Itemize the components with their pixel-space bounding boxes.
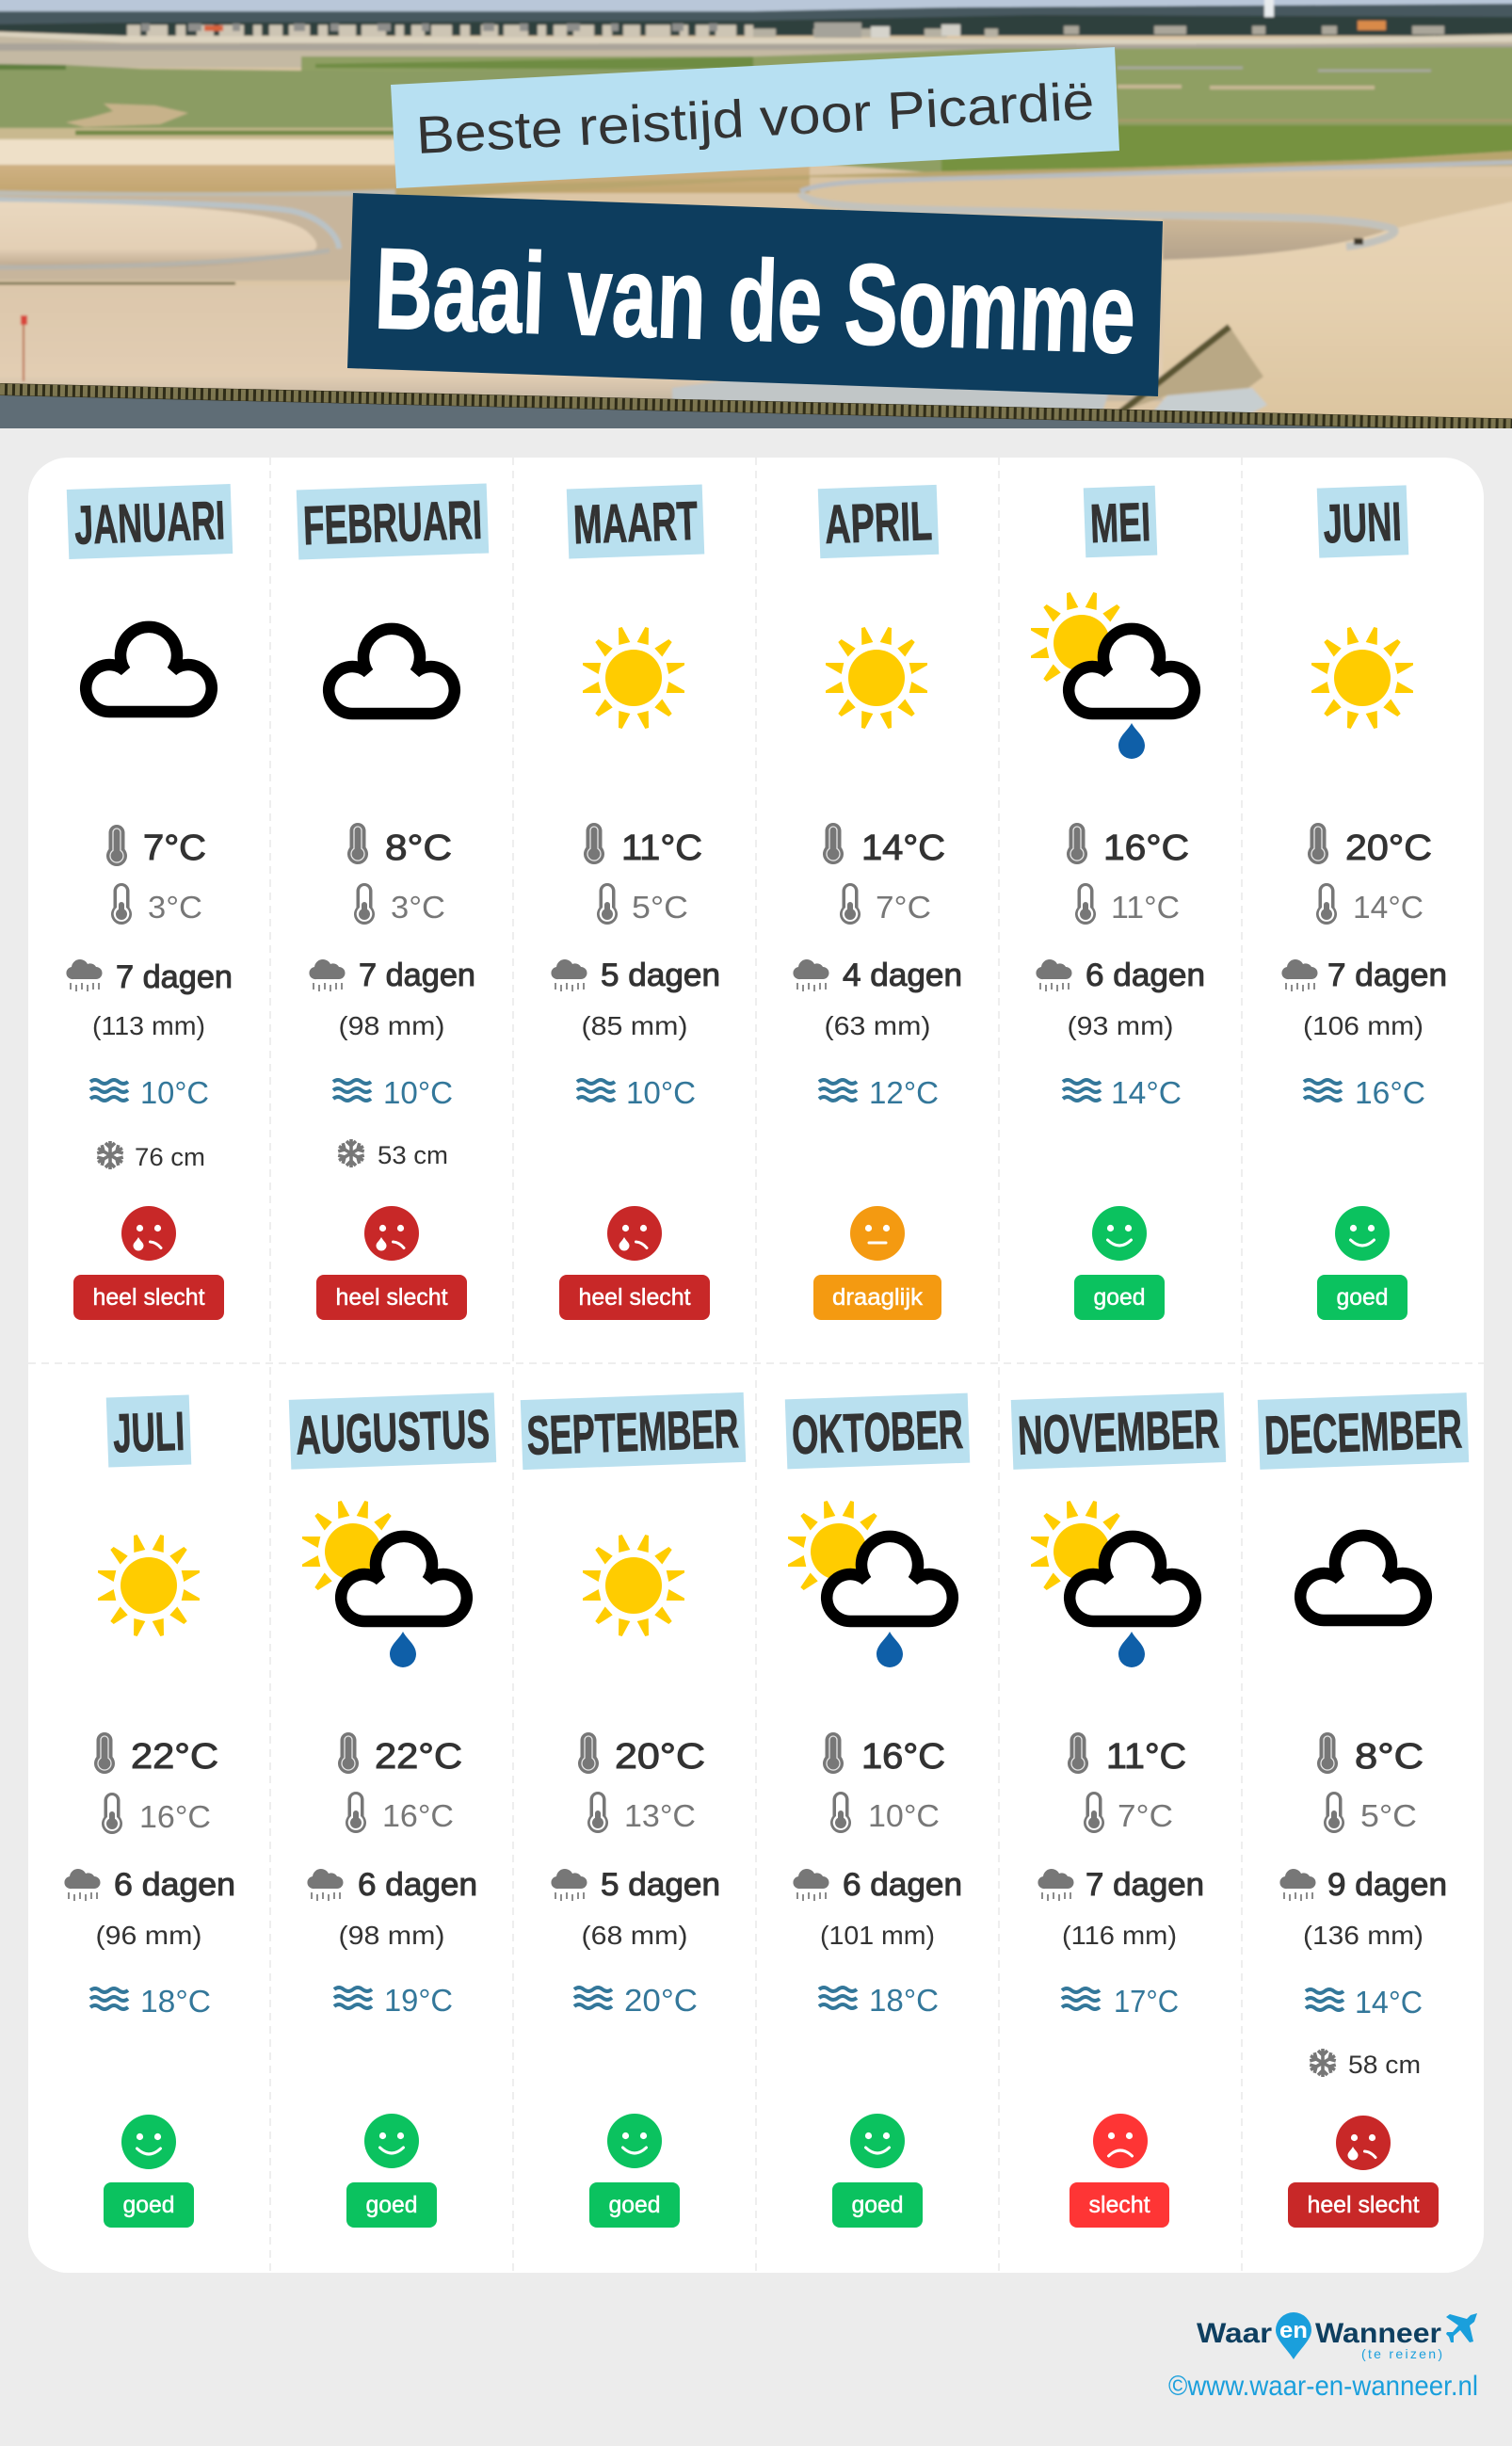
rainfall: (68 mm)	[582, 1921, 687, 1950]
month heading: JUNI	[1322, 491, 1403, 555]
icon: thermometer high	[1068, 1732, 1088, 1774]
month heading: APRIL	[824, 491, 933, 555]
panel: juni	[1281, 485, 1447, 1320]
rain days: 6 dagen	[1086, 957, 1205, 993]
title text: Baai van de Somme	[373, 224, 1137, 378]
max temperature: 14°C	[861, 829, 945, 868]
min temperature: 7°C	[1118, 1798, 1173, 1833]
icon: sun	[98, 1535, 200, 1636]
icon: thermometer low	[1084, 1792, 1104, 1833]
panel: april	[793, 485, 962, 1320]
icon: rain	[551, 1869, 587, 1901]
max temperature: 8°C	[385, 829, 452, 868]
rating badge: goed	[851, 2192, 904, 2218]
rating badge	[589, 2182, 680, 2228]
rating badge: heel slecht	[1307, 2192, 1420, 2218]
icon: cloud	[329, 629, 455, 714]
rating badge	[346, 2182, 437, 2228]
icon: thermometer low	[111, 883, 132, 925]
rainfall: (98 mm)	[339, 1011, 444, 1040]
min temperature: 11°C	[1111, 890, 1180, 925]
icon: thermometer high	[338, 1732, 359, 1774]
icon: crying face	[364, 1206, 419, 1261]
icon: sun behind rain cloud	[1031, 1501, 1196, 1667]
icon: sun	[583, 627, 684, 729]
rating badge: goed	[122, 2192, 175, 2218]
icon: sun	[583, 1535, 684, 1636]
icon: snowflake	[1309, 2049, 1337, 2077]
min temperature: 7°C	[876, 890, 931, 925]
icon: water	[333, 1080, 371, 1101]
panel: september	[521, 1392, 746, 2228]
icon: sun behind rain cloud	[788, 1501, 953, 1667]
icon: water	[574, 1987, 612, 2008]
icon: thermometer low	[1316, 883, 1337, 925]
month heading	[1317, 485, 1408, 558]
rain days: 4 dagen	[843, 957, 962, 993]
panel: januari	[66, 484, 233, 1320]
icon: thermometer low	[840, 883, 861, 925]
rating badge	[316, 1275, 467, 1320]
rainfall: (136 mm)	[1303, 1921, 1424, 1950]
rain days: 7 dagen	[116, 959, 233, 995]
subtitle text: Beste reistijd voor Picardië	[414, 71, 1096, 165]
max temperature: 20°C	[615, 1737, 705, 1777]
month heading	[818, 485, 939, 558]
logo: Waar en Wanneer: Waar	[1197, 2318, 1272, 2349]
icon: rain	[1279, 1869, 1316, 1901]
month heading	[67, 484, 233, 559]
icon: crying face	[121, 1206, 176, 1261]
icon: water	[334, 1987, 372, 2008]
panel: oktober	[785, 1393, 970, 2228]
rain days: 6 dagen	[358, 1867, 477, 1903]
icon: water	[577, 1080, 615, 1101]
website credit: ©www.waar-en-wanneer.nl	[1168, 2371, 1478, 2402]
month heading: AUGUSTUS	[295, 1398, 491, 1467]
rating badge	[832, 2182, 923, 2228]
water temperature: 18°C	[140, 1984, 211, 2019]
icon: sun	[826, 627, 927, 729]
icon: sun behind rain cloud	[302, 1501, 467, 1667]
icon: rain	[1036, 959, 1071, 991]
rain days: 7 dagen	[359, 957, 475, 993]
min temperature: 5°C	[632, 890, 688, 925]
max temperature: 16°C	[861, 1737, 945, 1777]
icon: cloud	[86, 627, 212, 712]
rating badge: draaglijk	[832, 1284, 924, 1311]
icon: rain	[551, 959, 587, 991]
snowfall: 76 cm	[135, 1143, 205, 1171]
icon: crying face	[607, 1206, 662, 1261]
icon: water	[1304, 1080, 1342, 1101]
header photo: Baai van de Somme landscape	[0, 0, 1512, 428]
snowfall: 58 cm	[1348, 2051, 1421, 2079]
icon: rain	[64, 1869, 100, 1901]
rating badge	[1074, 1275, 1165, 1320]
rain days: 7 dagen	[1086, 1867, 1204, 1903]
panel: maart	[551, 485, 720, 1320]
min temperature: 10°C	[868, 1798, 940, 1833]
icon: thermometer high	[347, 823, 368, 864]
month heading: SEPTEMBER	[525, 1398, 740, 1467]
water temperature: 18°C	[869, 1983, 939, 2018]
rain days: 6 dagen	[114, 1867, 235, 1903]
rating badge	[559, 1275, 710, 1320]
water temperature: 10°C	[140, 1075, 209, 1110]
main white card	[28, 458, 1484, 2273]
icon: water	[1306, 1989, 1343, 2010]
icon: happy face	[850, 2114, 905, 2168]
min temperature: 3°C	[391, 890, 445, 925]
month heading	[297, 483, 489, 560]
rating badge: heel slecht	[335, 1284, 448, 1311]
rating badge: heel slecht	[578, 1284, 691, 1311]
icon: thermometer high	[1317, 1732, 1338, 1774]
water temperature: 14°C	[1111, 1075, 1182, 1110]
month heading	[1011, 1392, 1226, 1470]
icon: sad face	[1093, 2114, 1148, 2168]
icon: thermometer low	[587, 1792, 608, 1833]
max temperature: 20°C	[1345, 829, 1432, 868]
panel: juli	[64, 1394, 235, 2228]
water temperature: 12°C	[869, 1075, 939, 1110]
icon: happy face	[121, 2115, 176, 2169]
rating badge: goed	[1094, 1284, 1145, 1311]
water temperature: 10°C	[383, 1075, 453, 1110]
water temperature: 19°C	[384, 1983, 453, 2018]
icon: thermometer high	[1308, 823, 1328, 864]
month heading: FEBRUARI	[302, 490, 483, 556]
icon: thermometer low	[597, 883, 618, 925]
month heading	[1084, 486, 1157, 557]
rain days: 5 dagen	[601, 1867, 720, 1903]
water temperature: 17°C	[1114, 1984, 1179, 2019]
icon: happy face	[364, 2114, 419, 2168]
icon: rain	[1037, 1869, 1073, 1901]
month heading: NOVEMBER	[1017, 1398, 1220, 1467]
rainfall: (116 mm)	[1062, 1921, 1177, 1950]
water temperature: 14°C	[1355, 1985, 1423, 2020]
icon: thermometer low	[1075, 883, 1096, 925]
icon: sun	[1311, 627, 1413, 729]
month heading	[106, 1394, 191, 1468]
icon: rain	[307, 1869, 343, 1901]
month heading	[521, 1392, 746, 1470]
month heading: MEI	[1089, 491, 1151, 555]
icon: sun behind rain cloud	[1031, 592, 1195, 759]
min temperature: 5°C	[1360, 1798, 1417, 1833]
rating badge: goed	[608, 2192, 661, 2218]
panel: december	[1258, 1392, 1469, 2228]
month heading: JULI	[112, 1401, 185, 1464]
rating badge: slecht	[1088, 2192, 1150, 2218]
icon: thermometer low	[102, 1793, 122, 1834]
rainfall: (63 mm)	[825, 1011, 930, 1040]
rainfall: (106 mm)	[1303, 1011, 1424, 1040]
panel: februari	[297, 483, 489, 1320]
icon: snowflake	[337, 1139, 365, 1167]
panel: mei	[1031, 486, 1205, 1320]
icon: thermometer high	[94, 1732, 115, 1774]
max temperature: 11°C	[1106, 1737, 1186, 1777]
rainfall: (113 mm)	[92, 1011, 205, 1040]
rating badge	[1288, 2182, 1439, 2228]
month heading: MAART	[572, 491, 699, 555]
month heading: JANUARI	[73, 490, 226, 556]
max temperature: 22°C	[131, 1737, 218, 1777]
water temperature: 10°C	[626, 1075, 696, 1110]
panel: augustus	[289, 1392, 496, 2228]
max temperature: 7°C	[143, 829, 206, 868]
icon: rain	[793, 959, 828, 991]
logo: Waar en Wanneer	[1197, 2312, 1477, 2361]
rating badge	[104, 2182, 194, 2228]
rainfall: (85 mm)	[582, 1011, 687, 1040]
icon: thermometer low	[346, 1792, 366, 1833]
water temperature: 16°C	[1355, 1075, 1425, 1110]
min temperature: 3°C	[148, 890, 202, 925]
rating badge	[73, 1275, 224, 1320]
rainfall: (101 mm)	[820, 1921, 935, 1950]
month heading	[567, 485, 704, 558]
min temperature: 14°C	[1353, 890, 1424, 925]
icon: water	[819, 1080, 857, 1101]
rainfall: (98 mm)	[339, 1921, 444, 1950]
rating badge: goed	[1337, 1284, 1388, 1311]
rain days: 5 dagen	[601, 957, 720, 993]
month heading	[785, 1393, 970, 1469]
panel: november	[1011, 1392, 1226, 2228]
max temperature: 16°C	[1103, 829, 1189, 868]
icon: thermometer low	[1324, 1792, 1344, 1833]
subtitle banner	[391, 47, 1119, 188]
water temperature: 20°C	[624, 1983, 698, 2018]
icon: thermometer high	[823, 1732, 844, 1774]
month heading	[289, 1392, 496, 1470]
rating badge: goed	[365, 2192, 418, 2218]
icon: thermometer high	[106, 825, 127, 866]
icon: thermometer low	[354, 883, 375, 925]
rainfall: (93 mm)	[1068, 1011, 1173, 1040]
icon: neutral face	[850, 1206, 905, 1261]
rainfall: (96 mm)	[96, 1921, 201, 1950]
rating badge	[1070, 2182, 1169, 2228]
min temperature: 16°C	[382, 1798, 454, 1833]
month heading: OKTOBER	[791, 1399, 964, 1466]
icon: happy face	[607, 2114, 662, 2168]
snowfall: 53 cm	[378, 1141, 448, 1169]
icon: rain	[309, 959, 345, 991]
rating badge	[813, 1275, 941, 1320]
icon: water	[1062, 1988, 1100, 2009]
min temperature: 13°C	[624, 1798, 696, 1833]
title banner	[347, 193, 1163, 396]
icon: snowflake	[96, 1141, 124, 1169]
icon: happy face	[1335, 1206, 1390, 1261]
icon: thermometer low	[830, 1792, 851, 1833]
icon: water	[90, 1988, 128, 2009]
rating badge	[1317, 1275, 1407, 1320]
rain days: 7 dagen	[1327, 957, 1447, 993]
icon: thermometer high	[823, 823, 844, 864]
rain days: 6 dagen	[843, 1867, 962, 1903]
icon: water	[90, 1080, 128, 1101]
max temperature: 22°C	[375, 1737, 462, 1777]
logo: Waar en Wanneer: Wanneer	[1315, 2318, 1441, 2349]
icon: rain	[1281, 959, 1318, 991]
icon: rain	[793, 1869, 828, 1901]
icon: water	[819, 1987, 857, 2008]
max temperature: 8°C	[1355, 1737, 1424, 1777]
icon: rain	[66, 959, 102, 991]
icon: crying face	[1336, 2116, 1391, 2170]
rating badge: heel slecht	[92, 1284, 205, 1311]
logo: Waar en Wanneer: (te reizen)	[1361, 2346, 1442, 2361]
icon: happy face	[1092, 1206, 1147, 1261]
max temperature: 11°C	[621, 829, 702, 868]
min temperature: 16°C	[139, 1799, 211, 1834]
icon: water	[1063, 1080, 1101, 1101]
logo: Waar en Wanneer: en	[1279, 2318, 1308, 2343]
icon: thermometer high	[584, 823, 604, 864]
rain days: 9 dagen	[1327, 1867, 1447, 1903]
icon: thermometer high	[1067, 823, 1087, 864]
icon: cloud	[1300, 1536, 1426, 1620]
icon: thermometer high	[578, 1732, 599, 1774]
